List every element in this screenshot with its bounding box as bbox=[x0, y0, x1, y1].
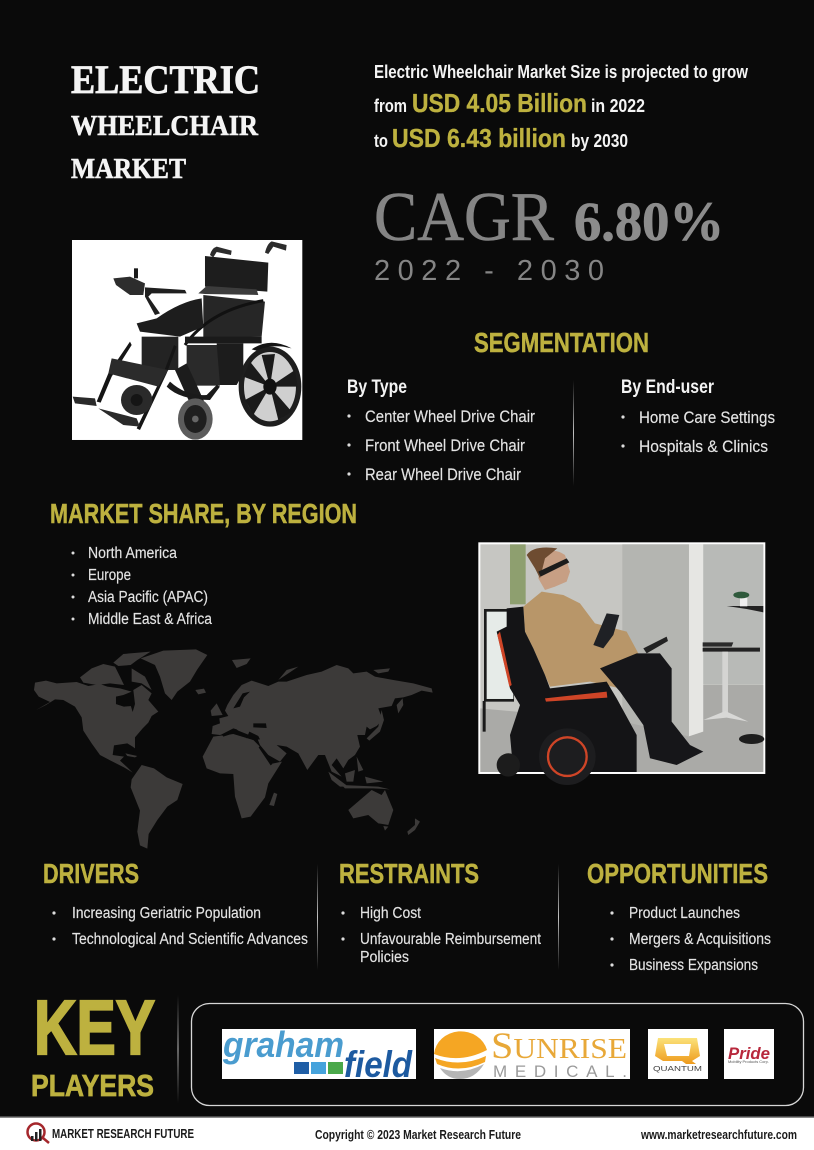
key players heading bbox=[31, 985, 155, 1103]
opportunities: Product Launches bbox=[629, 905, 740, 922]
logo: Market Research Future bbox=[28, 1124, 194, 1143]
front casters bbox=[121, 385, 213, 440]
market size statement: USD 6.43 billion bbox=[392, 123, 566, 153]
sign board bbox=[483, 609, 514, 732]
backrest and seat bbox=[137, 241, 287, 345]
rear wheel bbox=[241, 343, 299, 424]
market size statement bbox=[374, 62, 749, 153]
logo: Graham-Field bbox=[222, 1024, 416, 1085]
CAGR figure: 6.80% bbox=[574, 191, 724, 252]
logo: Sunrise Medical: SUNRISE bbox=[491, 1026, 627, 1067]
logo: Sunrise Medical: MEDICAL. bbox=[493, 1062, 627, 1081]
region list: Asia Pacific (APAC) bbox=[88, 589, 208, 606]
drivers bbox=[43, 858, 308, 948]
cafe table and plant bbox=[703, 592, 764, 744]
region list: Middle East & Africa bbox=[88, 611, 212, 628]
logo: Quantum bbox=[648, 1029, 708, 1079]
segmentation: by end-user: Hospitals & Clinics bbox=[639, 437, 768, 456]
opportunities: OPPORTUNITIES bbox=[587, 858, 768, 889]
restraints: High Cost bbox=[360, 905, 422, 922]
restraints: RESTRAINTS bbox=[339, 858, 479, 889]
segmentation: by end-user: Home Care Settings bbox=[639, 408, 775, 427]
key players heading: PLAYERS bbox=[31, 1068, 154, 1103]
battery and frame bbox=[73, 337, 243, 430]
drivers: DRIVERS bbox=[43, 858, 139, 889]
logo: Pride Mobility: Pride bbox=[728, 1044, 770, 1063]
CAGR figure: CAGR bbox=[374, 179, 554, 256]
inland seas bbox=[116, 692, 272, 765]
opportunities: Business Expansions bbox=[629, 957, 758, 974]
logo: Quantum: QUANTUM bbox=[653, 1064, 702, 1073]
CAGR figure: 2022 - 2030 bbox=[374, 255, 604, 287]
restraints bbox=[339, 858, 542, 966]
market size statement: Electric Wheelchair Market Size is projected to grow bbox=[374, 62, 749, 82]
world map bbox=[34, 649, 433, 849]
footer bar: Copyright © 2023 Market Research Future bbox=[315, 1128, 521, 1142]
concrete walls bbox=[480, 544, 763, 772]
segmentation: by end-user bbox=[621, 377, 775, 456]
woman bbox=[523, 547, 703, 765]
wheelchair bbox=[497, 607, 668, 785]
wheelchair photo bbox=[72, 240, 302, 440]
segmentation: by type: Front Wheel Drive Chair bbox=[365, 436, 525, 455]
drivers: Increasing Geriatric Population bbox=[72, 905, 261, 922]
footer bar bbox=[0, 1116, 814, 1150]
title bbox=[71, 57, 260, 185]
joystick bbox=[113, 268, 145, 295]
logo: Sunrise Medical bbox=[434, 1026, 630, 1081]
segmentation: by end-user: By End-user bbox=[621, 377, 714, 398]
segmentation heading: SEGMENTATION bbox=[474, 327, 649, 358]
title: WHEELCHAIR bbox=[71, 111, 259, 142]
logo: Market Research Future: MARKET RESEARCH FUTURE bbox=[52, 1126, 194, 1141]
logo: Pride Mobility: Mobility Products Corp. bbox=[728, 1059, 769, 1064]
market size statement: by 2030 bbox=[571, 131, 628, 151]
key players logo panel bbox=[192, 1004, 804, 1106]
segmentation: by type bbox=[347, 377, 535, 484]
region list bbox=[72, 545, 212, 628]
opportunities: Mergers & Acquisitions bbox=[629, 931, 771, 948]
title: ELECTRIC bbox=[71, 57, 260, 102]
opportunities bbox=[587, 858, 771, 974]
restraints: Policies bbox=[360, 949, 409, 966]
market size statement: in 2022 bbox=[591, 96, 645, 116]
logo: Graham-Field: graham bbox=[222, 1024, 344, 1065]
key players heading: KEY bbox=[34, 985, 155, 1071]
restraints: Unfavourable Reimbursement bbox=[360, 931, 542, 948]
CAGR figure bbox=[374, 179, 724, 287]
logo: Graham-Field: field bbox=[344, 1044, 413, 1085]
market size statement: USD 4.05 Billion bbox=[412, 88, 587, 118]
market size statement: from bbox=[374, 96, 407, 116]
region list: Europe bbox=[88, 567, 131, 584]
drivers: Technological And Scientific Advances bbox=[72, 931, 308, 948]
market share heading: MARKET SHARE, BY REGION bbox=[50, 498, 357, 529]
woman in power wheelchair photo bbox=[478, 542, 765, 785]
segmentation: by type: Center Wheel Drive Chair bbox=[365, 407, 535, 426]
title: MARKET bbox=[71, 154, 186, 185]
market size statement: to bbox=[374, 131, 388, 151]
segmentation: by type: Rear Wheel Drive Chair bbox=[365, 465, 521, 484]
logo: Pride Mobility bbox=[724, 1029, 774, 1079]
region list: North America bbox=[88, 545, 177, 562]
segmentation: by type: By Type bbox=[347, 377, 407, 398]
